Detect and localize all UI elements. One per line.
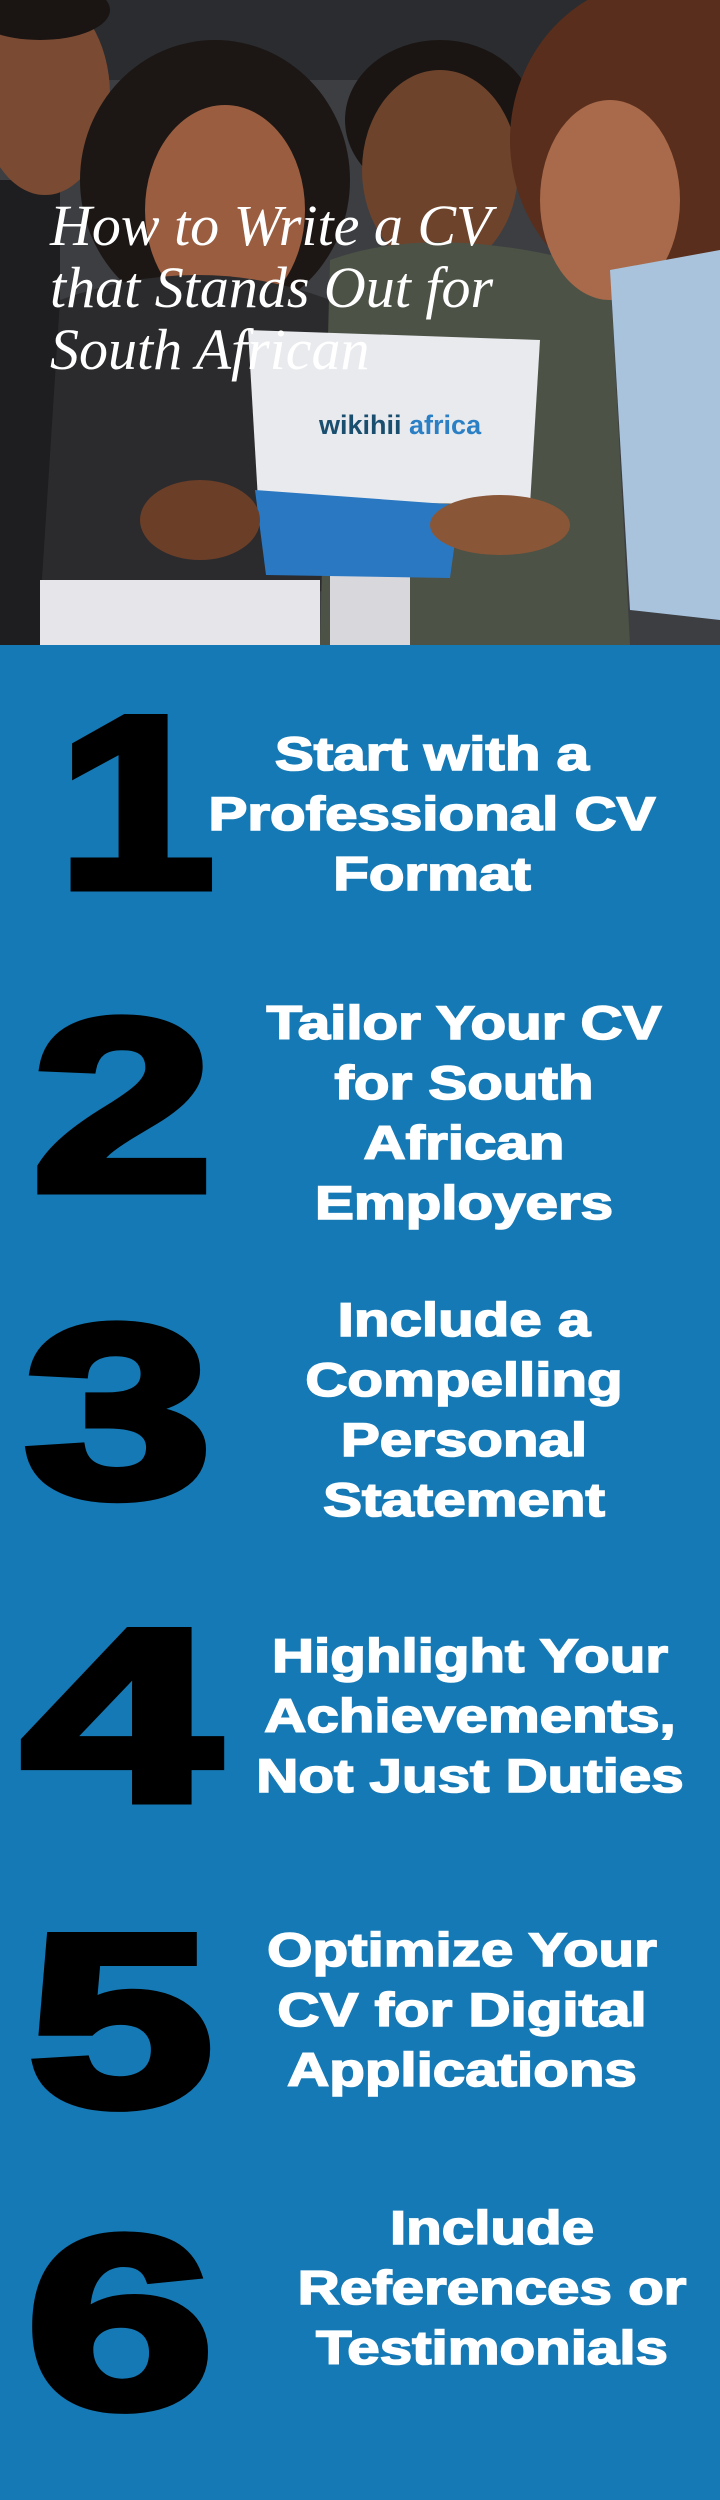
text 1: Professional CV: [209, 787, 655, 840]
person: man centre: [320, 40, 630, 645]
text 3: [305, 1293, 623, 1526]
text 4: Highlight Your: [272, 1629, 668, 1682]
text 4: Not Just Duties: [256, 1749, 684, 1802]
item 6: [26, 2185, 686, 2459]
item 5: [28, 1883, 657, 2157]
item 4: [20, 1578, 684, 1852]
text 6: Testimonials: [316, 2321, 668, 2374]
text 3: Include a: [338, 1293, 590, 1346]
number 4: 4: [22, 1578, 220, 1852]
text 5: [267, 1923, 657, 2097]
logo: wikihii africa: [319, 410, 481, 440]
title: South African: [50, 317, 370, 382]
item 3: [24, 1274, 623, 1548]
title: [49, 193, 497, 382]
number 2: 2: [32, 968, 213, 1242]
text 1: [209, 727, 656, 900]
item 2: [32, 968, 662, 1242]
text 2: [266, 996, 662, 1230]
header photo: [0, 0, 720, 645]
text 2: African: [364, 1116, 564, 1169]
text 6: [298, 2201, 686, 2374]
number 6: 6: [26, 2185, 214, 2459]
number 5: 5: [28, 1883, 213, 2157]
text 4: [256, 1629, 684, 1802]
text 1: Start with a: [275, 727, 589, 780]
person: woman right: [510, 0, 720, 620]
text 1: Format: [333, 847, 531, 900]
text 6: Include: [390, 2201, 594, 2254]
person: left man: [0, 0, 110, 645]
number 1: 1: [58, 665, 215, 939]
text 5: CV for Digital: [277, 1983, 647, 2036]
title: that Stands Out for: [50, 255, 493, 320]
text 5: Optimize Your: [267, 1923, 657, 1976]
text 3: Statement: [323, 1473, 605, 1526]
item 1: [58, 665, 656, 939]
paper and folder: [140, 330, 570, 578]
text 2: Tailor Your CV: [266, 996, 662, 1049]
text 6: References or: [298, 2261, 686, 2314]
text 3: Personal: [341, 1413, 587, 1466]
number 3: 3: [24, 1274, 212, 1548]
text 5: Applications: [287, 2043, 637, 2096]
text 2: for South: [335, 1056, 593, 1109]
text 3: Compelling: [305, 1353, 623, 1406]
text 4: Achievements,: [264, 1689, 676, 1742]
title: How to Write a CV: [50, 193, 491, 258]
person: woman with curly hair: [40, 40, 350, 645]
text 2: Employers: [315, 1176, 613, 1229]
